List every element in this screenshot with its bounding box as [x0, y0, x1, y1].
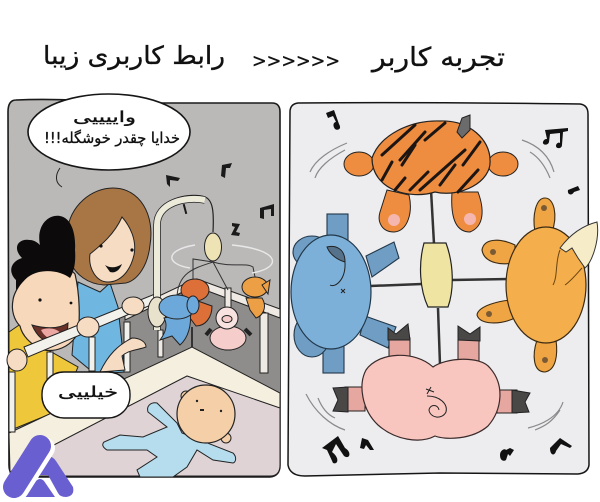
speech bubble: father: [42, 372, 130, 418]
man mouth: [32, 323, 68, 342]
panel background: [8, 99, 280, 477]
motion lines: [306, 140, 563, 430]
music notes: [166, 163, 274, 236]
baby face: [196, 400, 222, 412]
logo right arm: [32, 457, 73, 497]
fox limbs: [477, 198, 557, 372]
fox body: [506, 227, 586, 343]
crib mobile: [148, 195, 272, 350]
toy pig: [206, 307, 251, 350]
mobile hub: [204, 233, 222, 261]
man: [9, 216, 79, 428]
elephant tail: [327, 246, 345, 262]
baby body: [103, 403, 236, 477]
baby ears: [181, 391, 231, 443]
music notes: [322, 110, 580, 463]
man and woman hands: [7, 297, 146, 372]
pig curly tail: [426, 387, 446, 417]
mattress side: [9, 347, 280, 472]
fox tail: [560, 222, 598, 268]
woman hair: [66, 188, 151, 285]
woman: [66, 188, 151, 374]
tiger body: [372, 121, 490, 195]
tiger arms and feet: [344, 152, 374, 176]
speech bubble: mother: [28, 94, 190, 170]
tiger stripes: [382, 123, 480, 192]
woman face: [90, 217, 135, 282]
heading: beautiful user interface: رابط کاربری زیبا: [43, 41, 225, 70]
man hair: [11, 216, 75, 290]
baby: [103, 385, 236, 477]
toy tiger: [181, 279, 212, 326]
toy fox: [242, 277, 270, 318]
heading row: [43, 41, 505, 73]
pig hooves: [333, 324, 530, 413]
elephant body: [291, 235, 371, 349]
panel background: [288, 103, 589, 476]
tiger toy: [344, 115, 518, 232]
crib near bars: [9, 322, 130, 432]
logo inner triangle: [23, 479, 55, 497]
mother text line 1: واییییی: [73, 108, 136, 126]
central rods: [370, 190, 512, 365]
mobile rods: [177, 259, 255, 297]
crib far rails and bars: [125, 279, 280, 373]
crib near rail: [24, 294, 158, 357]
pig toy: [333, 324, 530, 440]
baby head: [177, 385, 235, 443]
father text: خیلییی: [58, 383, 118, 401]
speech bubble tail: [56, 168, 62, 187]
man head: [12, 265, 79, 350]
woman blue top: [72, 282, 125, 374]
mattress floor: [10, 376, 280, 476]
pig legs: [345, 338, 517, 413]
mobile clamp: [148, 297, 166, 327]
pig body: [362, 355, 500, 440]
mother text line 2: خدایا چقدر خوشگله!!!: [44, 129, 180, 147]
fox toy: [477, 198, 598, 372]
woman eyes and mouth: [99, 244, 134, 272]
panel: parents admire the crib mobile: [7, 94, 280, 477]
crib interior wall: [100, 282, 280, 393]
logo gap: [18, 448, 44, 489]
elephant toy: [291, 214, 399, 373]
fox paw pads: [486, 205, 548, 363]
heading: user experience: تجربه کاربر: [370, 43, 505, 73]
elephant limbs and ears: [293, 214, 399, 373]
man yellow shirt: [9, 323, 78, 428]
panel: toys seen from the baby's view: [288, 103, 598, 476]
man eyes: [38, 298, 42, 302]
toy elephant: [159, 295, 199, 345]
logo: [14, 446, 73, 497]
tiger tail: [457, 115, 470, 138]
mobile arch: [155, 195, 213, 296]
motion lines: [172, 245, 272, 273]
heading arrows: >>>>>>: [252, 50, 340, 72]
logo left arm: [14, 446, 40, 487]
central hub: [421, 243, 452, 307]
